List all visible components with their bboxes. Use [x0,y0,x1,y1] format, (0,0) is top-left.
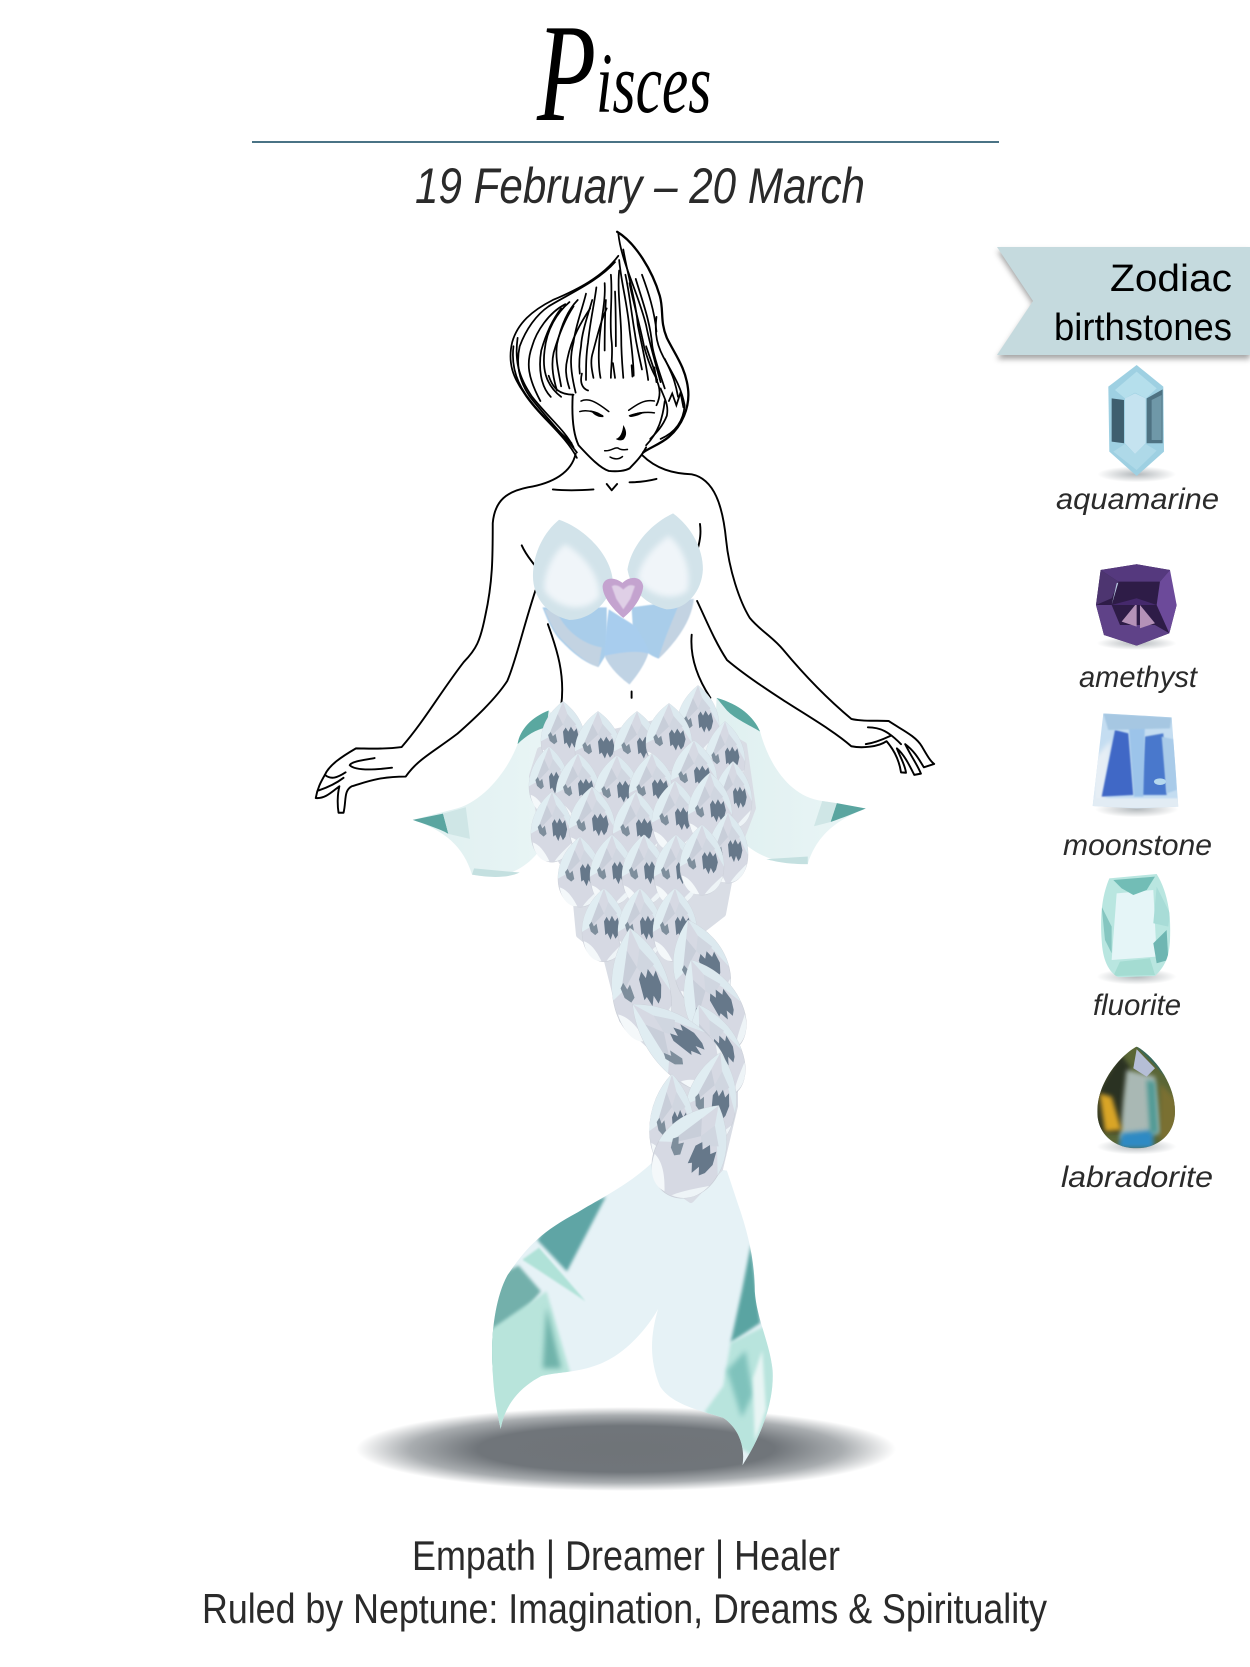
illustration: mermaid [316,232,934,1491]
gem: labradorite [1095,1045,1178,1155]
left outer arm and shoulder [316,454,576,813]
label: fluorite: fluorite [1093,989,1181,1022]
label: aquamarine: aquamarine [1056,483,1219,516]
scale backing [532,715,753,1200]
traits line: Empath | Dreamer | Healer [412,1532,840,1579]
tail fin [489,1157,779,1473]
title: isces [596,35,711,131]
aquamarine cup right [627,513,703,609]
label: labradorite: labradorite [1061,1161,1213,1194]
moonstone left [542,607,607,667]
waist [548,624,710,706]
gem: aquamarine [1097,365,1176,482]
face outline [572,395,646,471]
label: amethyst: amethyst [1079,661,1199,694]
hair outline [510,232,688,458]
moonstone right [632,599,694,659]
amethyst heart [603,578,643,618]
ribbon: zodiac birthstones: Zodiac [1110,258,1232,300]
left finger details [319,758,392,790]
chest gems [533,513,703,684]
title: P [536,0,596,151]
collar bones and chest marks [522,479,700,698]
hair strands [618,233,661,382]
gem: fluorite [1101,874,1172,984]
nose [616,425,626,440]
moonstone centre [605,609,649,684]
ribbon: zodiac birthstones [997,247,1250,359]
title divider line [252,141,999,143]
gem: amethyst [1096,564,1177,650]
ruling planet line: Ruled by Neptune: Imagination, Dreams & Spirituality [202,1585,1047,1632]
date range: 19 February – 20 March [415,158,865,214]
label: moonstone: moonstone [1063,829,1212,862]
left fin [413,710,565,877]
mermaid scales [529,685,758,1211]
right fin [714,698,866,864]
aquamarine cup left [533,520,613,620]
right finger details [866,727,901,744]
ribbon: zodiac birthstones: birthstones [1054,307,1232,349]
right outer arm and shoulder [642,455,934,775]
floor shadow [356,1407,896,1491]
side fins [413,698,866,877]
body line art [316,232,934,813]
gem: moonstone [1090,712,1180,817]
eyes [580,400,654,416]
mouth [605,448,627,459]
